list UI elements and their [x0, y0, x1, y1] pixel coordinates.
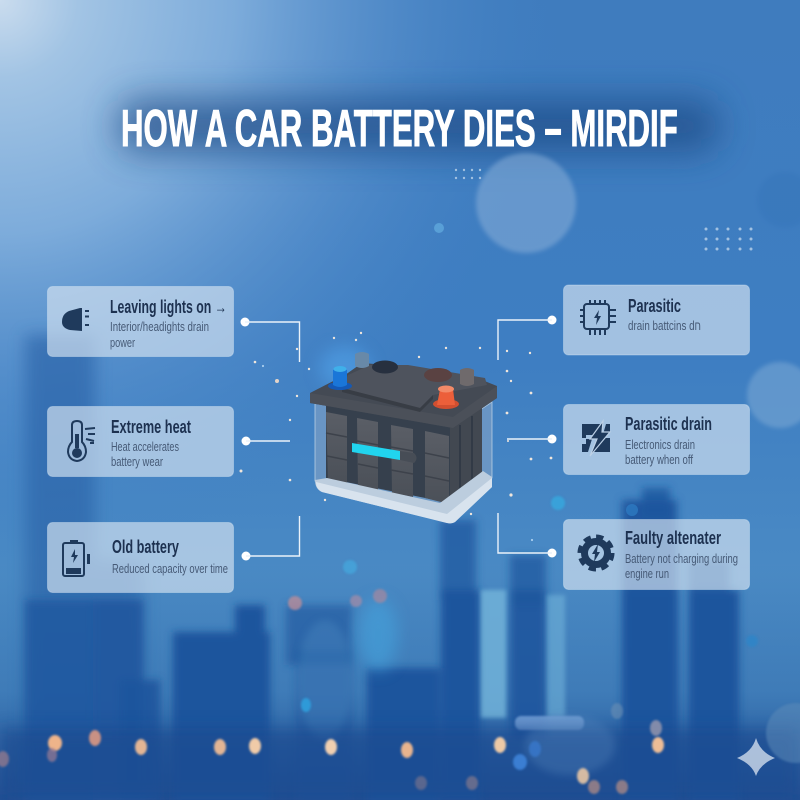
panel: parasitic drain: battery when off [625, 453, 693, 467]
terminal caps [372, 360, 398, 374]
dark band behind title [118, 100, 718, 152]
rear grey terminal right [460, 368, 474, 386]
sparkle particles around battery [240, 332, 552, 541]
heading text: Old battery [112, 537, 179, 557]
panel: leaving lights on [48, 286, 234, 356]
red terminal [433, 386, 459, 409]
icon: lightning puzzle [582, 421, 610, 456]
heading text: Parasitic [628, 296, 681, 316]
transparent case [315, 402, 492, 508]
icon: headlight [62, 308, 89, 331]
heading text: Parasitic drain [625, 414, 712, 434]
icon: circuit chip [580, 300, 616, 335]
blue terminal [328, 366, 352, 390]
panel: extreme heat [48, 406, 234, 476]
description text: Battery not charging during [625, 552, 738, 566]
description text: Electronics drain [625, 438, 695, 452]
decorative dot grids [455, 169, 752, 250]
icon: sparkle star [737, 738, 775, 776]
connector lines right [498, 316, 556, 558]
description text: drain battcins dח [628, 319, 701, 333]
battery cells [326, 404, 482, 505]
icon: low battery [63, 540, 90, 576]
dark dividers between cells [326, 404, 450, 503]
description text: Heat accelerates [111, 440, 179, 454]
panel: old battery [48, 522, 234, 592]
case base [315, 471, 492, 523]
panel: faulty alternator [564, 520, 750, 590]
panel: parasitic drain [564, 404, 750, 474]
panel: parasitic [564, 285, 750, 355]
heading text: Faulty altenater [625, 528, 721, 548]
description text: Reduced capacity over time [112, 562, 228, 576]
panel: extreme heat: battery wear [111, 455, 163, 469]
connector lines left [240, 318, 300, 560]
cyan charge indicator [352, 443, 400, 460]
icon: gear with bolt [580, 538, 612, 568]
title: HOW A CAR BATTERY DIES – MIRDIF [121, 100, 678, 158]
heading text: Extreme heat [111, 417, 191, 437]
battery illustration [310, 346, 497, 523]
icon: thermometer [68, 421, 95, 461]
description text: Interior/headights drain [110, 320, 209, 334]
battery glow [319, 346, 371, 390]
blurred city skyline [0, 335, 800, 800]
panel: faulty alternator: engine run [625, 567, 669, 581]
rear grey terminal left [355, 352, 369, 368]
battery lid [310, 363, 497, 428]
heading text: Leaving lights on → [110, 297, 227, 317]
panel: leaving lights on: power [110, 336, 135, 350]
